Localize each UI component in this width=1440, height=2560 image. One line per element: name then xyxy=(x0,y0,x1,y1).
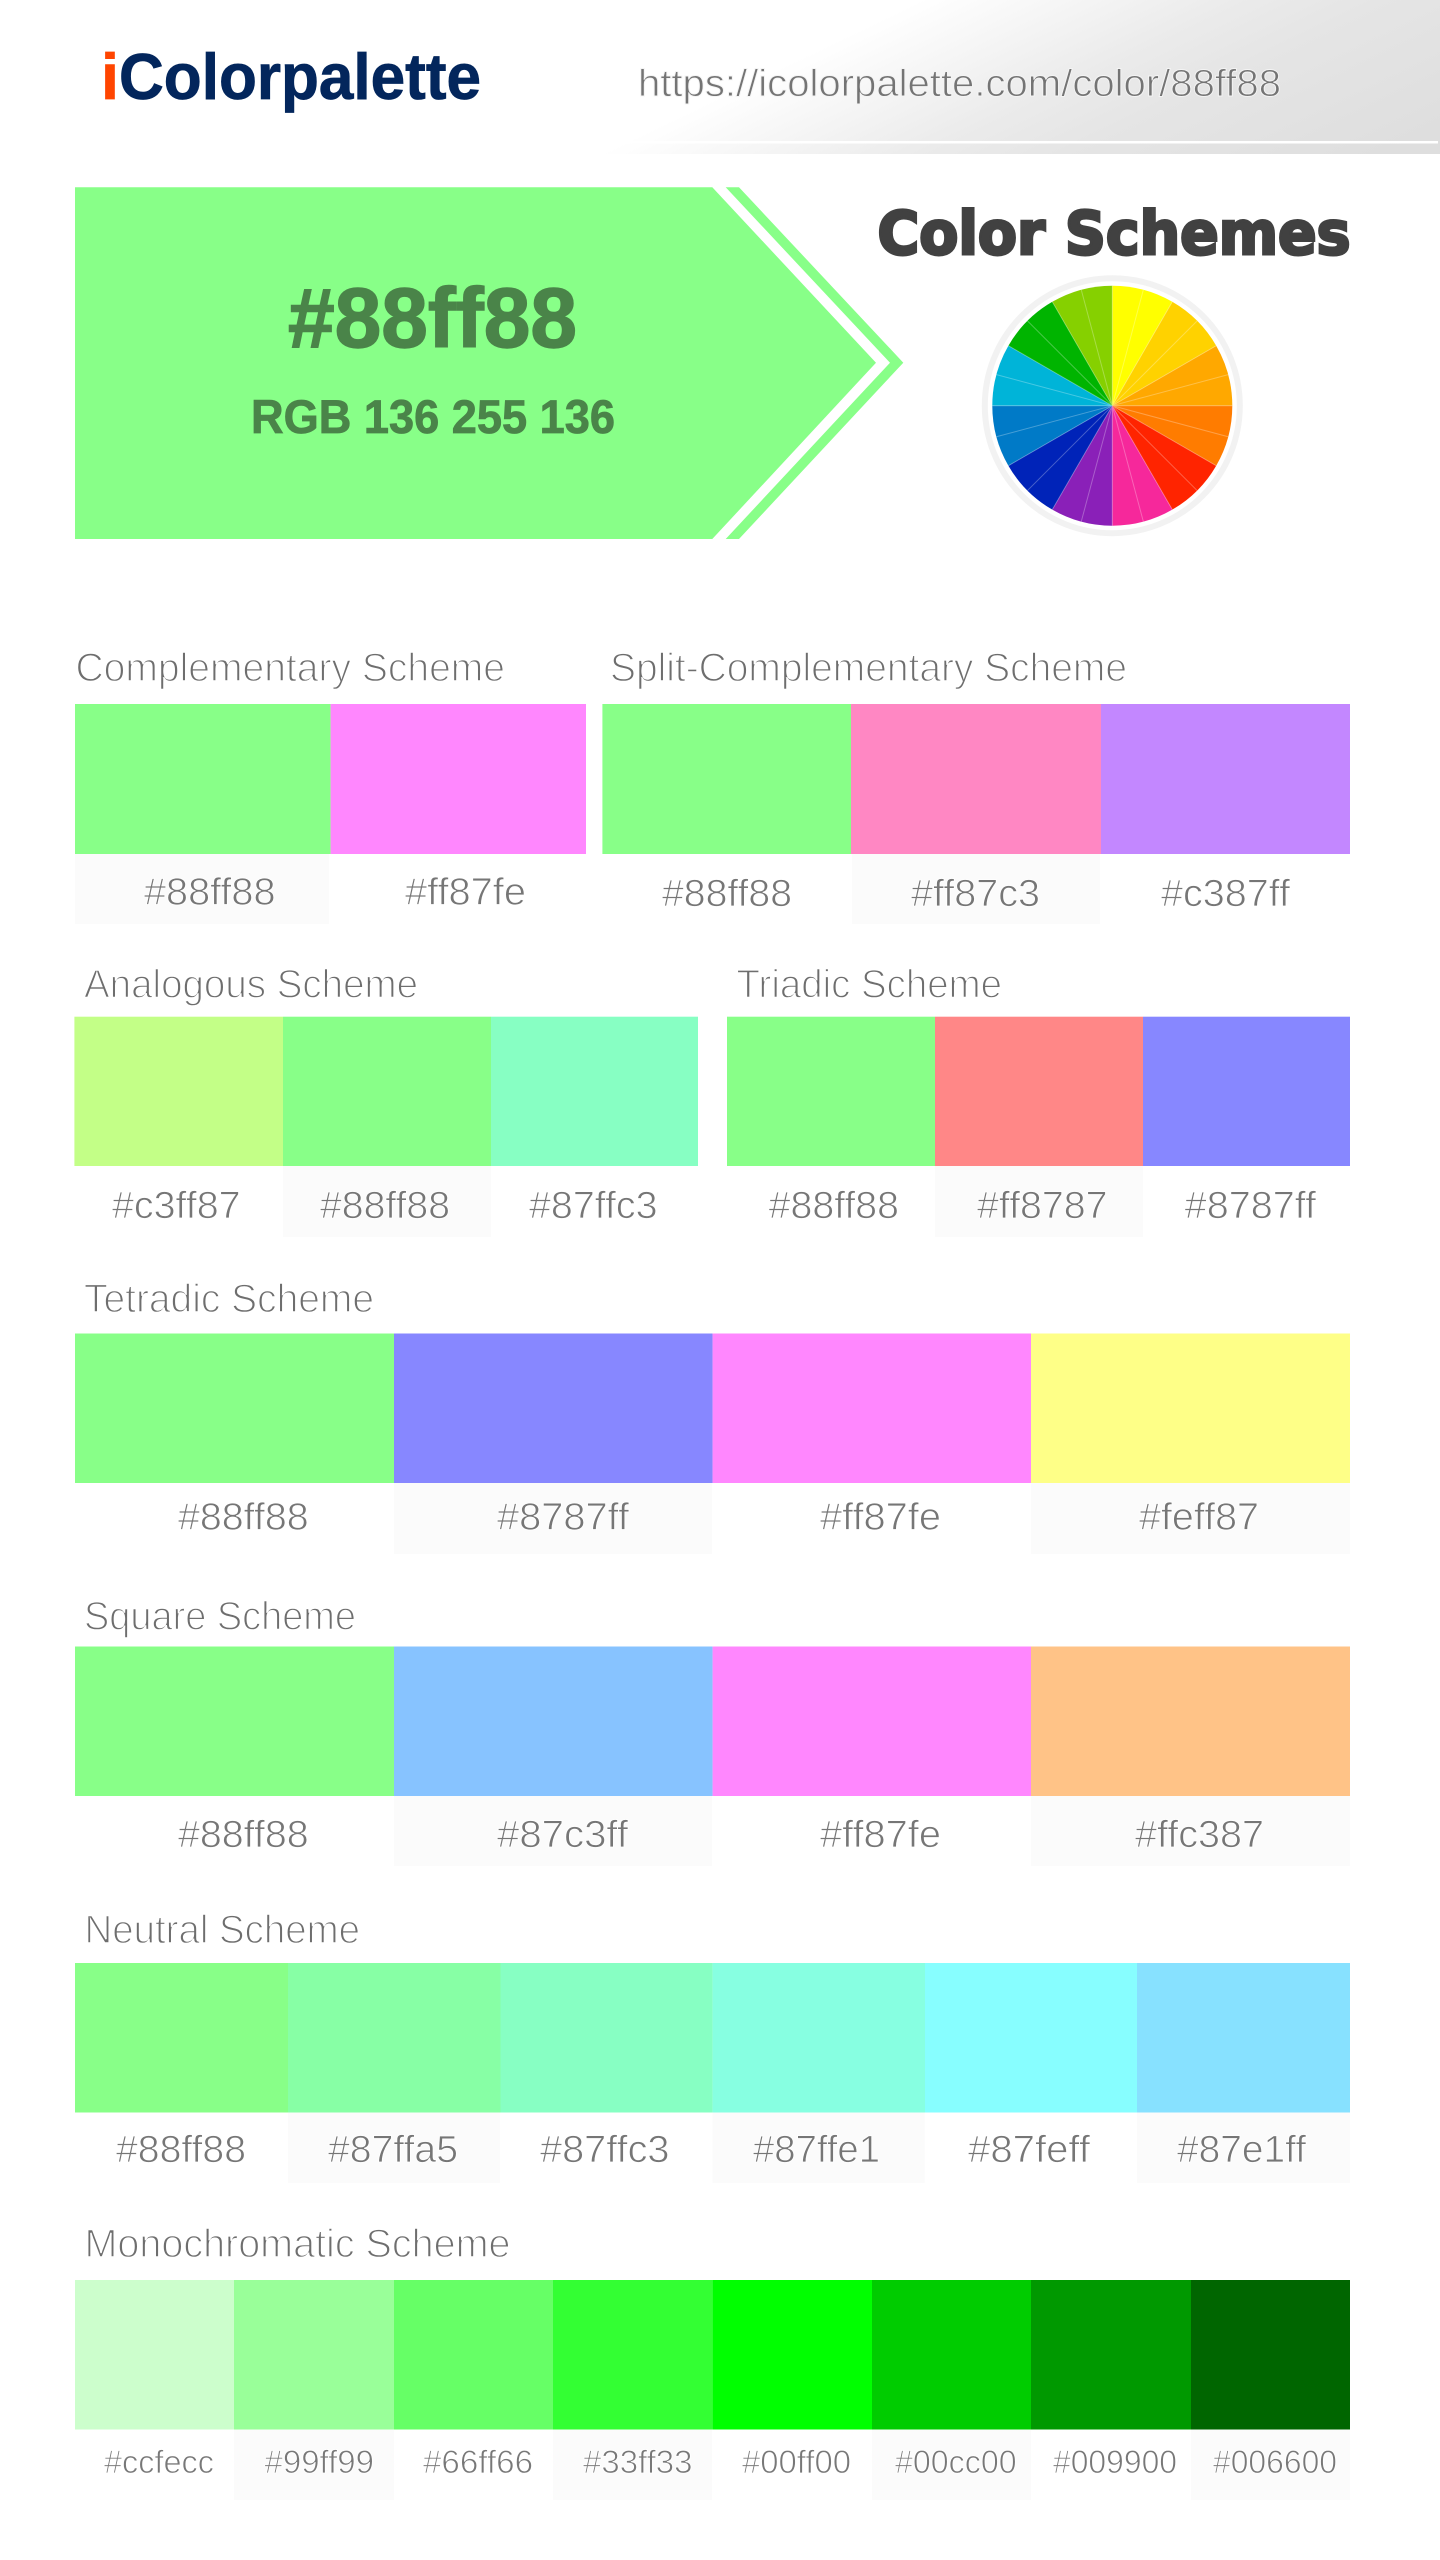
swatches xyxy=(75,704,586,854)
panel: complementary scheme xyxy=(75,646,586,924)
hex labels: #c387ff xyxy=(1161,873,1290,915)
hex labels: #87e1ff xyxy=(1177,2129,1306,2171)
hex labels: #87ffa5 xyxy=(328,2129,458,2171)
hex labels: #88ff88 xyxy=(116,2129,246,2171)
panel: tetradic scheme xyxy=(75,1277,1350,1554)
swatches xyxy=(75,2280,1350,2430)
hex labels: #ccfecc xyxy=(104,2444,214,2480)
hex labels: #ffc387 xyxy=(1135,1814,1264,1856)
heading: Square Scheme xyxy=(84,1594,356,1638)
panel: analogous scheme xyxy=(74,962,698,1237)
header band xyxy=(0,0,1440,154)
hex value: #88ff88 xyxy=(288,271,577,365)
swatches xyxy=(75,1646,1350,1796)
heading: Neutral Scheme xyxy=(84,1908,360,1952)
hex labels: #006600 xyxy=(1213,2444,1337,2480)
hex labels: #00ff00 xyxy=(742,2444,851,2480)
hex labels: #88ff88 xyxy=(178,1496,309,1538)
heading: Complementary Scheme xyxy=(76,646,505,690)
swatches xyxy=(727,1017,1350,1166)
hex labels: #00cc00 xyxy=(895,2444,1017,2480)
hex labels xyxy=(662,854,1290,924)
hex labels: #feff87 xyxy=(1139,1496,1259,1538)
swatches xyxy=(75,1334,1350,1483)
hex labels: #87c3ff xyxy=(497,1814,628,1856)
rgb value: RGB 136 255 136 xyxy=(251,390,615,443)
main pentagon xyxy=(75,187,876,539)
panel: square scheme xyxy=(75,1594,1350,1866)
panel: monochromatic scheme xyxy=(75,2222,1350,2500)
hex labels: #88ff88 xyxy=(769,1185,899,1227)
hex labels: #ff87c3 xyxy=(911,873,1040,915)
hex labels: #99ff99 xyxy=(264,2444,374,2480)
hex labels: #87ffe1 xyxy=(753,2129,880,2171)
hex labels: #88ff88 xyxy=(178,1814,309,1856)
hex labels: #88ff88 xyxy=(662,873,792,915)
hex labels: #87ffc3 xyxy=(540,2129,670,2171)
hex labels: #33ff33 xyxy=(583,2444,692,2480)
hex labels: #ff8787 xyxy=(977,1185,1108,1227)
hex labels xyxy=(75,854,526,924)
heading: Analogous Scheme xyxy=(84,962,418,1006)
hex labels xyxy=(769,1166,1316,1237)
icon: color wheel xyxy=(985,278,1240,533)
hex labels: #8787ff xyxy=(1185,1185,1316,1227)
heading: Triadic Scheme xyxy=(736,962,1002,1006)
swatches xyxy=(74,1017,698,1166)
hex labels xyxy=(104,2430,1350,2500)
hex labels: #88ff88 xyxy=(144,872,276,914)
hex labels: #87ffc3 xyxy=(529,1185,658,1227)
hex labels xyxy=(178,1796,1350,1866)
hex labels: #8787ff xyxy=(497,1496,629,1538)
hex labels: #88ff88 xyxy=(320,1185,450,1227)
panel: neutral scheme xyxy=(75,1908,1350,2183)
hero arrow panel xyxy=(75,187,903,539)
hex labels: #009900 xyxy=(1053,2444,1177,2480)
hex labels xyxy=(178,1483,1350,1554)
url: https://icolorpalette.com/color/88ff88 xyxy=(638,63,1281,105)
hex labels: #ff87fe xyxy=(405,872,526,914)
hex labels: #ff87fe xyxy=(820,1814,941,1856)
hex labels: #ff87fe xyxy=(820,1496,941,1538)
heading: Monochromatic Scheme xyxy=(84,2222,510,2266)
hex labels xyxy=(112,1166,658,1237)
hex labels xyxy=(116,2112,1350,2183)
logo: iColorpalette: Colorpalette xyxy=(119,40,481,113)
panel: triadic scheme xyxy=(727,962,1350,1237)
swatches xyxy=(602,704,1350,854)
hex labels: #87feff xyxy=(968,2129,1090,2171)
hex labels: #c3ff87 xyxy=(112,1185,241,1227)
hex labels: #66ff66 xyxy=(423,2444,533,2480)
panel: split-complementary scheme xyxy=(602,646,1350,924)
heading: Tetradic Scheme xyxy=(84,1277,374,1321)
title: Color Schemes: Color Schemes xyxy=(878,199,1350,269)
swatches xyxy=(75,1963,1350,2112)
heading: Split-Complementary Scheme xyxy=(610,646,1127,690)
logo: iColorpalette: i xyxy=(101,40,119,113)
outer chevron xyxy=(726,187,903,539)
